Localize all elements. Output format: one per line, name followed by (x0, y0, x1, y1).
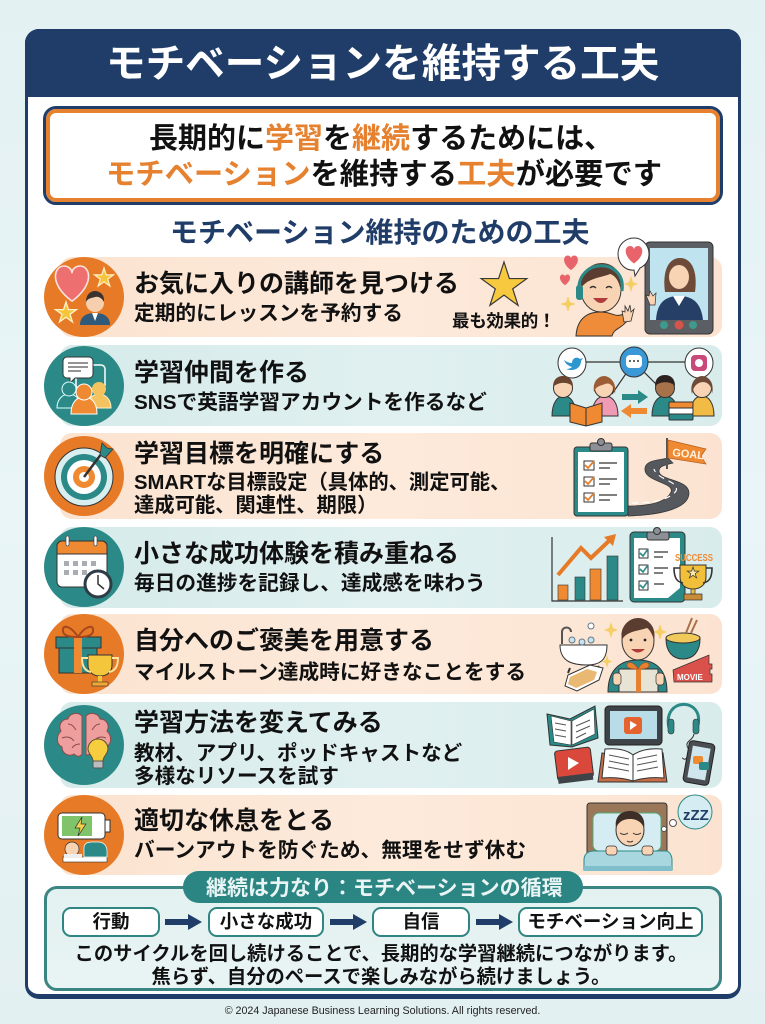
panel: proper rest (44, 794, 722, 875)
arrow (476, 914, 513, 930)
callout text: モチベーションを維持する工夫が必要です (106, 158, 662, 191)
arrow (330, 914, 367, 930)
cycle heading (183, 871, 583, 903)
icon: heart stars teacher (54, 265, 116, 325)
heading: 自分へのご褒美を用意する (134, 627, 434, 655)
step: motivation up: モチベーション向上 (527, 911, 694, 932)
icon: gift and trophy (56, 626, 119, 686)
step: confidence (372, 907, 470, 937)
description: 定期的にレッスンを予約する (134, 302, 403, 325)
illustration: learning resources (546, 702, 716, 786)
panel: small wins (44, 527, 722, 608)
illustration: growth chart and trophy: SUCCESS (675, 552, 713, 564)
heading: お気に入りの講師を見つける (134, 270, 459, 298)
description: マイルストーン達成時に好きなことをする (134, 661, 526, 684)
illustration: sleeping: zZZ (683, 807, 709, 824)
copyright: © 2024 Japanese Business Learning Solutions. All rights reserved. (225, 1005, 540, 1017)
description (134, 471, 510, 517)
illustration: sleeping (584, 794, 712, 871)
cycle note: 焦らず、自分のペースで楽しみながら続けましょう。 (152, 967, 610, 988)
panel: clear goals (44, 433, 722, 519)
heading: 小さな成功体験を積み重ねる (134, 540, 459, 568)
description: 毎日の進捗を記録し、達成感を味わう (134, 572, 486, 595)
panel: change methods (44, 702, 722, 788)
icon: calendar and clock (56, 536, 112, 598)
description: 多様なリソースを試す (134, 765, 339, 788)
icon: brain and bulb (56, 712, 112, 768)
description (134, 742, 462, 788)
step: small success: 小さな成功 (220, 911, 312, 932)
illustration: social network (552, 346, 714, 426)
heading: 学習方法を変えてみる (134, 709, 383, 737)
badge: most effective: 最も効果的！ (452, 311, 555, 331)
heading: 学習仲間を作る (134, 359, 309, 387)
illustration: treats and gift (560, 618, 712, 692)
description: バーンアウトを防ぐため、無理をせず休む (134, 839, 526, 862)
panel: motivation cycle (44, 871, 722, 991)
step: small success (208, 907, 324, 937)
description: 達成可能、関連性、期限） (134, 495, 377, 517)
callout (43, 106, 723, 205)
description: SNSで英語学習アカウントを作るなど (134, 391, 487, 414)
description: 教材、アプリ、ポッドキャストなど (134, 742, 462, 765)
illustration: student and tablet (560, 238, 714, 336)
icon: big star (479, 260, 528, 307)
cycle heading: 継続は力なり：モチベーションの循環 (206, 877, 563, 900)
icon: chat and group (56, 356, 112, 414)
callout text: 長期的に学習を継続するためには、 (149, 123, 613, 155)
arrow (165, 914, 202, 930)
panel: favourite teacher (44, 238, 722, 337)
frame (44, 886, 722, 991)
step: action: 行動 (92, 911, 130, 932)
heading: 適切な休息をとる (134, 807, 334, 835)
illustration: checklist and road to goal: GOAL (672, 447, 705, 462)
icon: target with arrow (54, 442, 114, 506)
step: action (62, 907, 160, 937)
description: SMARTな目標設定（具体的、測定可能、 (134, 472, 510, 494)
step: confidence: 自信 (402, 911, 440, 932)
heading: 学習目標を明確にする (134, 440, 384, 468)
step: motivation up (518, 907, 703, 937)
panel: reward (44, 614, 722, 694)
icon: battery and sleeper (58, 812, 110, 862)
panel: study friends (44, 345, 722, 426)
cycle note (75, 943, 687, 988)
title banner (25, 29, 741, 97)
callout text (106, 123, 662, 191)
section heading: モチベーション維持のための工夫 (170, 216, 589, 248)
illustration: growth chart and trophy (551, 527, 713, 602)
illustration: checklist and road to goal (574, 438, 707, 516)
illustration: treats and gift: MOVIE (677, 673, 703, 682)
title: モチベーションを維持する工夫 (106, 42, 659, 86)
cycle note: このサイクルを回し続けることで、長期的な学習継続につながります。 (75, 944, 687, 965)
